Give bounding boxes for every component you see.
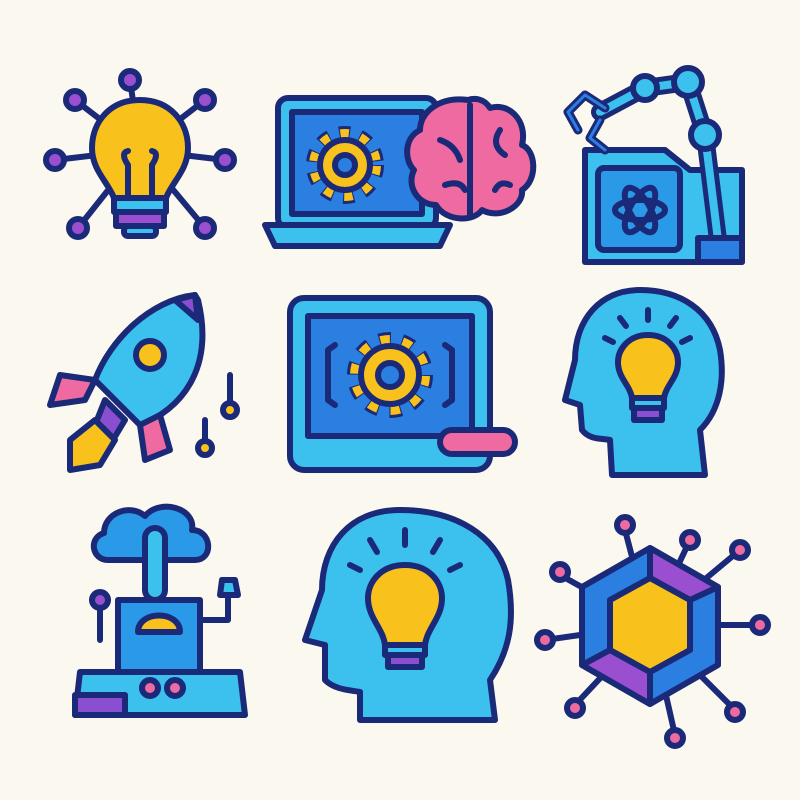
- icon: rocket: [50, 295, 237, 470]
- icon: tablet with gear: [290, 298, 515, 470]
- icon: head with lightbulb (center): [305, 510, 511, 720]
- icon: lightbulb network: [46, 71, 234, 237]
- icon: hexagon network: [537, 517, 768, 746]
- icon: laptop with gear and brain: [265, 98, 533, 246]
- icon: robotic arm: [568, 68, 742, 262]
- icon: robot with cloud: [75, 507, 245, 715]
- icon: head with lightbulb (right): [565, 290, 722, 475]
